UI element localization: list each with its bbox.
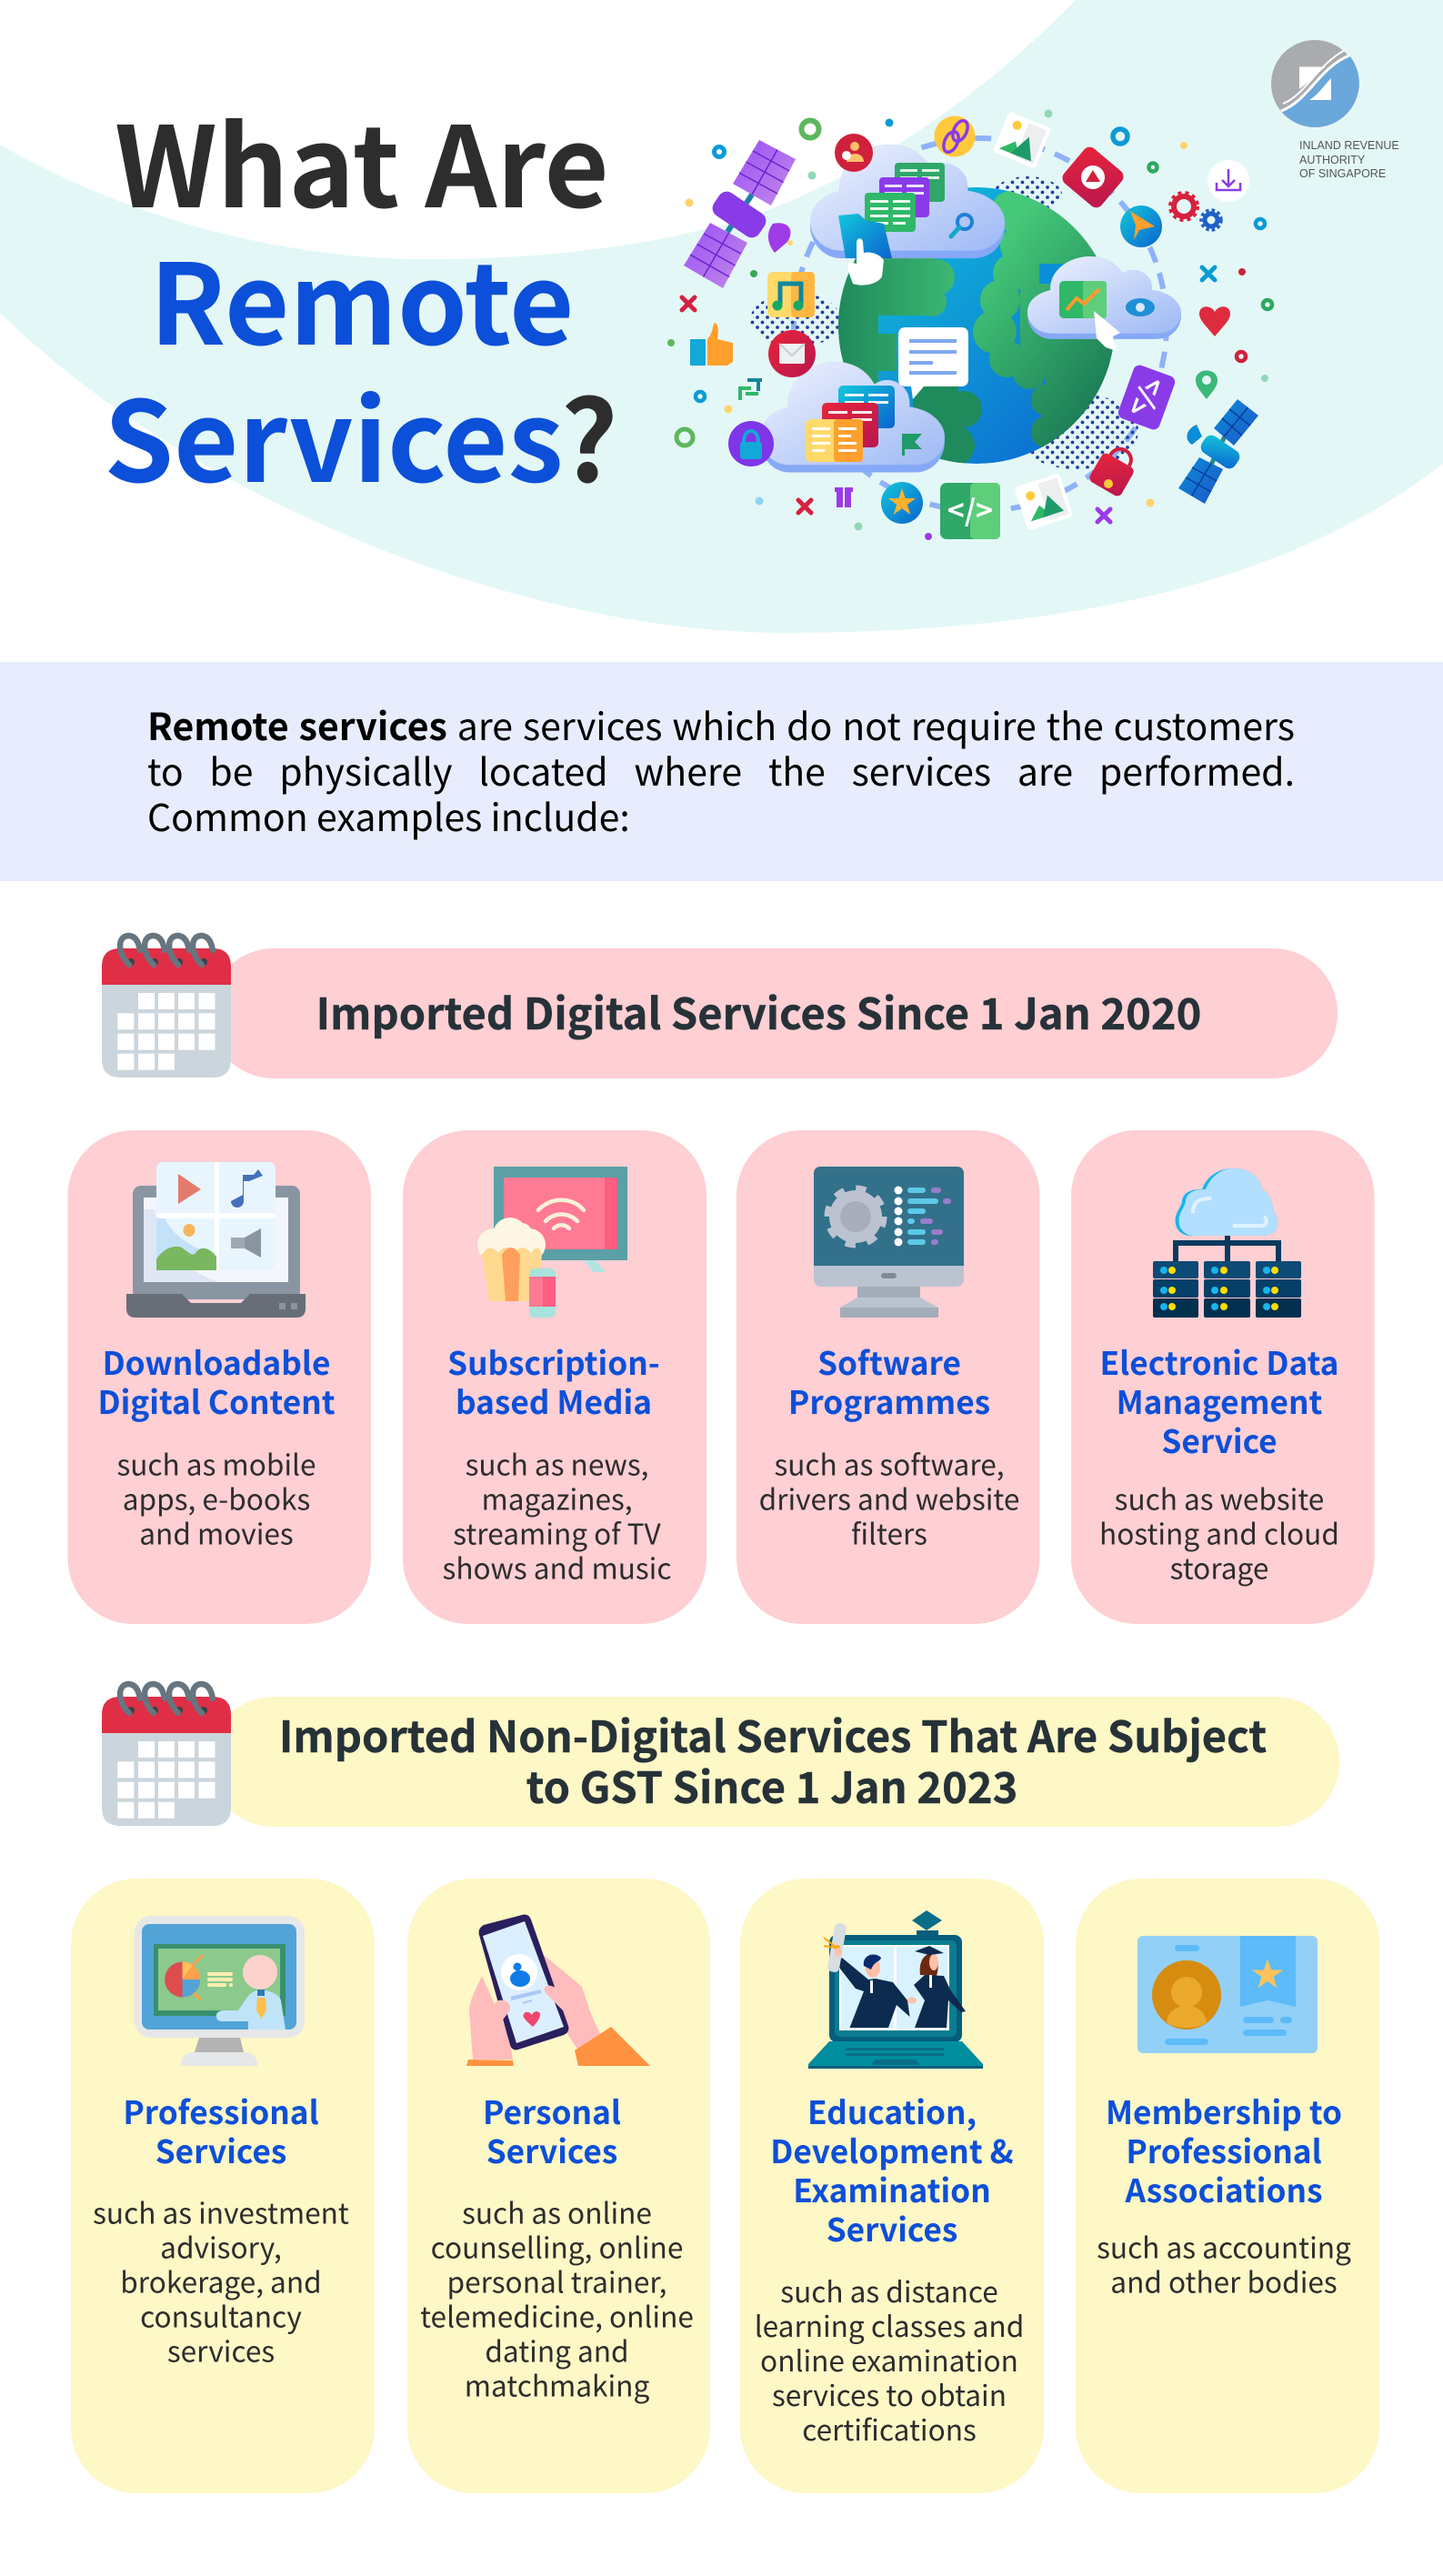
description: matchmaking xyxy=(465,2364,649,2406)
heading: Software xyxy=(817,1338,961,1385)
heading: Services xyxy=(155,2127,286,2173)
description: such as news, xyxy=(466,1443,648,1485)
icon: code square xyxy=(940,483,1000,539)
intro text: Remote services are services which do not require the customers xyxy=(147,697,1295,751)
icon: code square: </> xyxy=(947,488,993,530)
description: such as accounting xyxy=(1097,2226,1351,2268)
description: consultancy xyxy=(140,2295,302,2337)
icon: video play xyxy=(1059,144,1127,211)
description: and other bodies xyxy=(1110,2260,1338,2302)
card: downloadable digital content xyxy=(67,1130,371,1624)
section banner: imported digital services xyxy=(102,936,1338,1078)
heading: Development & xyxy=(770,2127,1014,2173)
description: such as distance xyxy=(780,2270,998,2311)
icon: picture card xyxy=(993,111,1051,169)
heading: Professional xyxy=(1126,2127,1322,2173)
heading: Service xyxy=(1161,1417,1278,1463)
icon: star xyxy=(881,482,923,524)
icon: padlock red xyxy=(1087,441,1141,498)
title: Services? xyxy=(104,353,618,515)
halftone patches xyxy=(750,176,1138,469)
description: brokerage, and xyxy=(120,2260,322,2302)
icon: cloud and servers xyxy=(1153,1168,1301,1318)
icon: picture card 2 xyxy=(1015,473,1073,531)
heading: Management xyxy=(1117,1378,1323,1424)
decorative dots, rings and crosses xyxy=(667,109,1272,540)
description: filters xyxy=(851,1512,927,1554)
icon: pin xyxy=(1196,371,1218,399)
heading: Services xyxy=(827,2205,957,2251)
heading: based Media xyxy=(456,1378,652,1424)
description: telemedicine, online xyxy=(420,2295,694,2337)
description: magazines, xyxy=(481,1478,633,1519)
logo: Inland Revenue Authority of Singapore: OF SINGAPORE xyxy=(1299,167,1386,180)
icon: hands holding phone xyxy=(466,1915,650,2066)
logo: Inland Revenue Authority of Singapore xyxy=(1271,40,1399,180)
logo: Inland Revenue Authority of Singapore: INLAND REVENUE xyxy=(1299,139,1399,152)
panel: introduction band xyxy=(0,662,1443,881)
heading: Imported Non-Digital Services That Are Subject xyxy=(279,1702,1267,1765)
icon: TV, popcorn and drink xyxy=(477,1167,627,1318)
description: learning classes and xyxy=(755,2304,1024,2346)
icon: music xyxy=(767,272,815,317)
heading: Electronic Data xyxy=(1100,1338,1338,1385)
title: What Are xyxy=(115,78,609,240)
icon: gears xyxy=(1170,193,1221,230)
card: subscription-based media xyxy=(403,1130,706,1624)
background swoosh xyxy=(0,0,1443,633)
icon: lock xyxy=(728,421,774,466)
cloud: chart and cursor xyxy=(1027,256,1181,351)
heading: Professional xyxy=(123,2088,319,2134)
icon: contact xyxy=(835,134,873,172)
icon: membership card xyxy=(1137,1936,1318,2053)
description: hosting and cloud xyxy=(1099,1512,1339,1554)
heading: Digital Content xyxy=(97,1378,336,1424)
description: streaming of TV xyxy=(453,1512,662,1554)
heading: Personal xyxy=(483,2088,621,2134)
card: professional services xyxy=(71,1879,375,2493)
icon: thumbs up xyxy=(690,323,733,366)
description: advisory, xyxy=(160,2226,282,2268)
heading: to GST Since 1 Jan 2023 xyxy=(526,1753,1017,1816)
icon: heart xyxy=(1199,306,1230,336)
heading: Associations xyxy=(1125,2166,1322,2212)
title: Remote xyxy=(150,216,574,377)
description: drivers and website xyxy=(759,1478,1019,1519)
heading: Downloadable xyxy=(103,1338,330,1385)
heading: Education, xyxy=(807,2088,977,2134)
intro text: Common examples include: xyxy=(147,787,630,842)
description: online examination xyxy=(760,2339,1018,2381)
description: certifications xyxy=(802,2408,977,2450)
heading: Imported Digital Services Since 1 Jan 2020 xyxy=(316,979,1201,1042)
description: such as investment xyxy=(93,2191,349,2233)
description: personal trainer, xyxy=(447,2260,666,2302)
card: education, development and examination services xyxy=(740,1879,1044,2493)
app icons on the ring xyxy=(690,111,1249,539)
icon: laptop with media xyxy=(126,1162,306,1318)
description: services to obtain xyxy=(772,2373,1007,2415)
cloud: documents and flag xyxy=(760,362,945,473)
heading: Membership to xyxy=(1106,2088,1342,2134)
heading: Services xyxy=(486,2127,617,2173)
description: such as online xyxy=(462,2191,652,2233)
logo: Inland Revenue Authority of Singapore: AUTHORITY xyxy=(1299,154,1366,166)
card: membership to professional associations xyxy=(1076,1879,1379,2493)
icon: code card purple: </> xyxy=(1116,366,1174,425)
card: electronic data management service xyxy=(1071,1130,1375,1624)
hero illustration: globe, clouds and digital icons xyxy=(667,109,1272,540)
heading: Subscription- xyxy=(447,1338,660,1385)
satellite: blue xyxy=(1178,399,1258,504)
satellite: purple xyxy=(684,140,796,288)
intro text xyxy=(147,697,1295,842)
title xyxy=(104,78,618,515)
description: such as software, xyxy=(774,1443,1005,1485)
icon: link xyxy=(935,116,975,156)
icon: send xyxy=(1120,205,1162,247)
description: shows and music xyxy=(443,1547,671,1589)
description: such as website xyxy=(1115,1478,1324,1519)
card: software programmes xyxy=(737,1130,1040,1624)
icon: sync arrows xyxy=(740,378,762,400)
description: counselling, online xyxy=(431,2226,683,2268)
orbit ring xyxy=(794,138,1167,511)
card: personal services xyxy=(407,1879,710,2493)
section banner: imported non-digital services xyxy=(102,1684,1339,1827)
description: storage xyxy=(1170,1547,1268,1589)
intro text: to be physically located where the services are performed. xyxy=(147,742,1295,797)
heading: Programmes xyxy=(788,1378,990,1424)
description: services xyxy=(167,2330,275,2371)
icon: calendar xyxy=(102,1684,231,1826)
description: dating and xyxy=(485,2330,629,2371)
cloud: documents and folder xyxy=(810,145,1005,286)
icon: mail xyxy=(768,330,816,377)
icon: monitor with presenter xyxy=(135,1916,305,2066)
speech bubble xyxy=(898,327,968,399)
description: such as mobile xyxy=(116,1443,316,1485)
heading: Examination xyxy=(793,2166,991,2212)
icon: monitor with gear and code xyxy=(814,1167,964,1318)
description: and movies xyxy=(139,1512,294,1554)
icon: download bubble xyxy=(1208,160,1249,202)
icon: calendar xyxy=(102,936,231,1078)
icon: gift xyxy=(835,487,853,507)
icon: laptop with graduates xyxy=(808,1910,983,2069)
description: apps, e-books xyxy=(123,1478,310,1519)
globe xyxy=(835,182,1129,468)
